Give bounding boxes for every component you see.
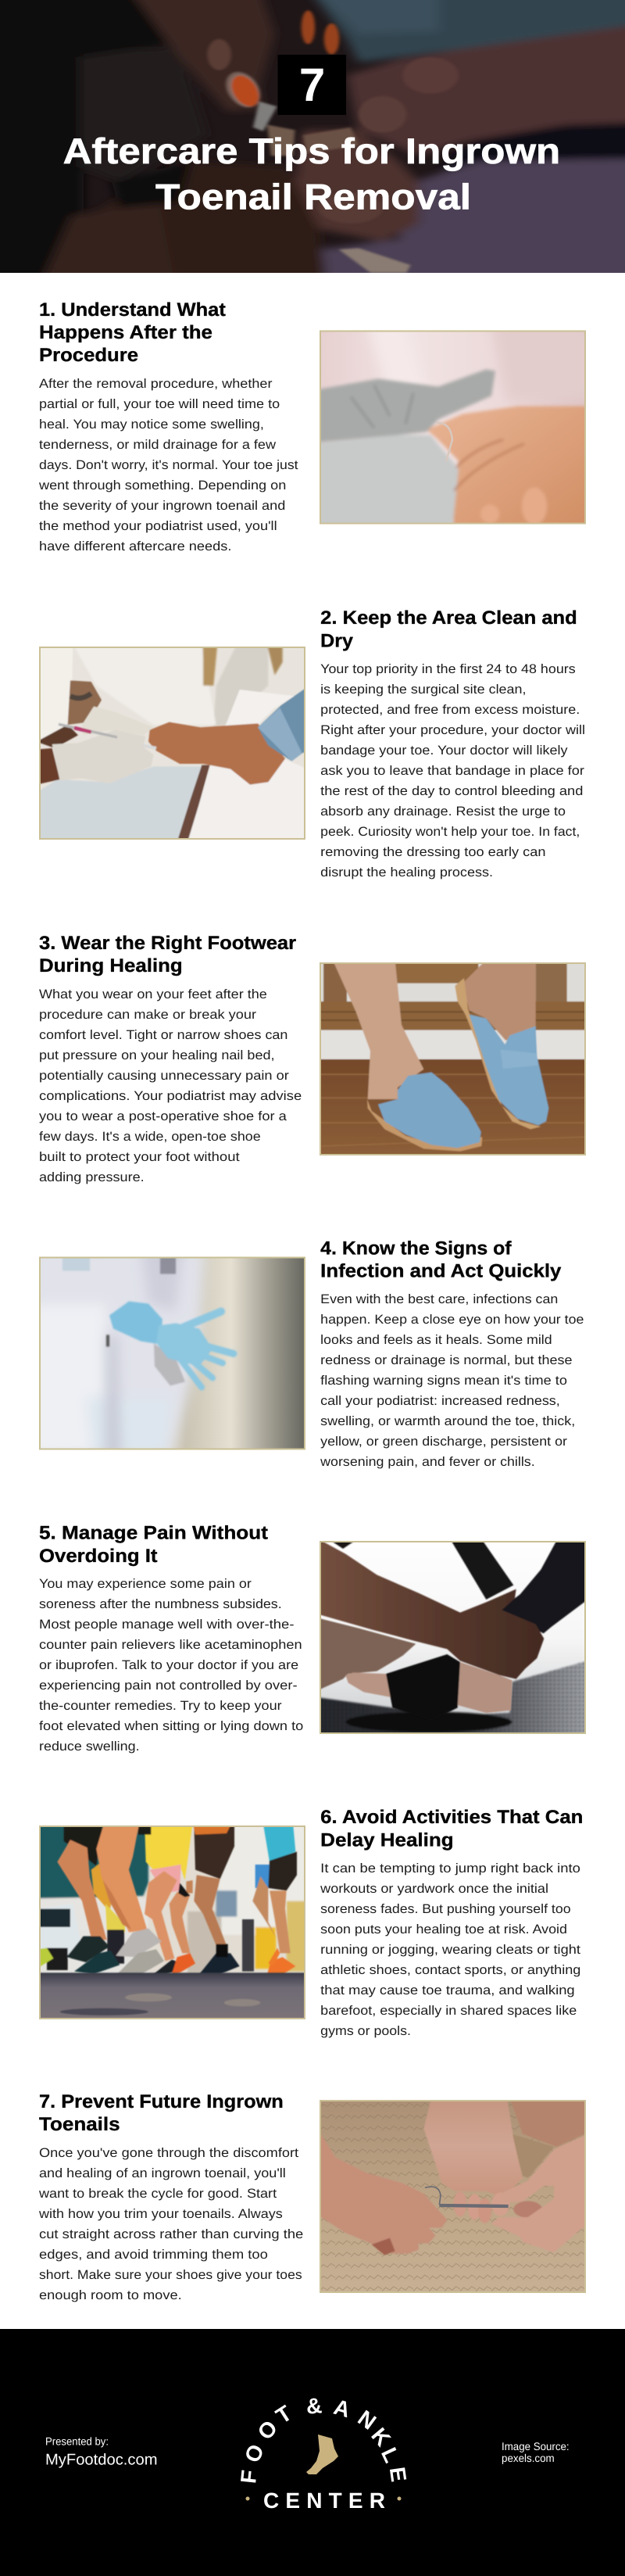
logo: Foot & Ankle Center: & (305, 2393, 323, 2419)
body text 4 (320, 1292, 584, 1469)
body text 7: and healing of an ingrown toenail, you'll (39, 2166, 286, 2180)
body text 6: soreness fades. But pushing yourself too (320, 1902, 571, 1916)
body text 2: removing the dressing too early can (320, 845, 545, 859)
body text 4: worsening pain, and fever or chills. (320, 1455, 535, 1469)
body text 5: counter pain relievers like acetaminophen (39, 1638, 302, 1652)
section 3 (39, 933, 588, 1184)
body text 7: cut straight across rather than curving the (39, 2227, 303, 2241)
section 7 (38, 2091, 588, 2302)
image source credit: pexels.com (502, 2452, 555, 2464)
body text 5: soreness after the numbness subsides. (39, 1597, 282, 1611)
body text 3: comfort level. Tight or narrow shoes can (39, 1028, 288, 1042)
body text 3: potentially causing unnecessary pain or (39, 1069, 289, 1083)
body text 2: protected, and free from excess moisture. (320, 703, 580, 717)
body text 5: reduce swelling. (39, 1739, 140, 1754)
photo 1: gloved hands holding toes (320, 330, 586, 524)
logo: Foot & Ankle Center: O (253, 2416, 282, 2445)
body text 2: bandage your toe. Your doctor will likely (320, 743, 568, 758)
heading 4: 4. Know the Signs of (320, 1238, 512, 1259)
body text 4: flashing warning signs mean it's time to (320, 1374, 567, 1388)
body text 3: built to protect your foot without (39, 1150, 240, 1164)
body text 6: gyms or pools. (320, 2024, 411, 2038)
body text 4: swelling, or warmth around the toe, thick, (320, 1414, 575, 1428)
body text 5: Most people manage well with over-the- (39, 1618, 294, 1632)
body text 4: looks and feels as it heals. Some mild (320, 1333, 552, 1347)
body text 1: partial or full, your toe will need time to (39, 397, 280, 411)
body text 1: tenderness, or mild drainage for a few (39, 438, 276, 452)
logo: Foot & Ankle Center: CENTER (263, 2488, 385, 2513)
body text 6: that may cause toe trauma, and walking (320, 1983, 575, 1997)
body text 1: went through something. Depending on (38, 478, 286, 493)
body text 2: is keeping the surgical site clean, (320, 683, 527, 697)
heading 7: 7. Prevent Future Ingrown (39, 2091, 284, 2112)
body text 2: peek. Curiosity won't help your toe. In fact, (320, 825, 580, 839)
body text 4: call your podiatrist: increased redness, (320, 1394, 560, 1408)
body text 1: After the removal procedure, whether (39, 377, 273, 391)
heading 6 (320, 1807, 583, 1851)
body text 5: experiencing pain not controlled by over- (39, 1679, 298, 1693)
photo 3: feet in blue mule shoes (320, 962, 586, 1155)
section 1 (38, 299, 593, 554)
body text 3: What you wear on your feet after the (39, 987, 267, 1001)
logo: Foot & Ankle Center: F (236, 2469, 262, 2485)
section 5 (39, 1523, 588, 1754)
body text 5: You may experience some pain or (39, 1577, 252, 1591)
logo: Foot & Ankle Center: K (366, 2424, 395, 2451)
body text 6 (320, 1861, 580, 2038)
body text 2: ask you to leave that bandage in place for (320, 764, 585, 778)
body text 3: procedure can make or break your (39, 1008, 257, 1022)
body text 3: few days. It's a wide, open-toe shoe (39, 1130, 261, 1144)
heading 3: During Healing (39, 955, 183, 976)
body text 5 (39, 1577, 303, 1754)
heading 5: Overdoing It (39, 1546, 158, 1567)
main title (63, 131, 560, 217)
body text 7: with how you trim your toenails. Always (38, 2207, 283, 2221)
body text 5: or ibuprofen. Talk to your doctor if you are (39, 1658, 298, 1672)
body text 2 (320, 662, 585, 880)
photo 2: podiatrist treating a foot (39, 647, 305, 840)
body text 6: running or jogging, wearing cleats or tight (320, 1943, 580, 1957)
heading 5: 5. Manage Pain Without (39, 1523, 268, 1543)
heading 2 (320, 607, 577, 652)
body text 3: adding pressure. (39, 1170, 145, 1184)
body text 4: Even with the best care, infections can (320, 1292, 558, 1306)
logo: Foot & Ankle Center: L (377, 2444, 404, 2467)
body text 2: Your top priority in the first 24 to 48 hours (320, 662, 576, 676)
section 4 (31, 1238, 584, 1469)
number badge (278, 55, 346, 115)
heading 6: 6. Avoid Activities That Can (320, 1807, 583, 1828)
logo: Foot & Ankle Center: O (240, 2441, 269, 2466)
heading 1: Happens After the (39, 322, 212, 343)
heading 1: Procedure (39, 345, 138, 366)
body text 5: the-counter remedies. Try to keep your (39, 1699, 282, 1713)
body text 2: the rest of the day to control bleeding and (320, 784, 583, 798)
heading 7 (39, 2091, 284, 2135)
photo 6: runners' legs and shoes on a road (39, 1825, 305, 2019)
heading 4 (320, 1238, 562, 1282)
body text 3: complications. Your podiatrist may advise (39, 1089, 302, 1103)
logo: Foot & Ankle Center: E (385, 2466, 411, 2483)
heading 1: 1. Understand What (39, 299, 226, 321)
body text 1: days. Don't worry, it's normal. Your toe just (39, 458, 298, 472)
heading 1 (39, 299, 226, 366)
body text 5: foot elevated when sitting or lying down to (39, 1719, 303, 1733)
presented by credit: Presented by: (45, 2434, 109, 2447)
number badge: 7 (299, 59, 325, 111)
body text 6: soon puts your healing toe at risk. Avoid (320, 1922, 567, 1936)
presented by credit (45, 2434, 158, 2469)
heading 5 (39, 1523, 268, 1567)
body text 7 (38, 2146, 303, 2302)
body text 3 (39, 987, 302, 1184)
body text 6: barefoot, especially in shared spaces like (320, 2004, 577, 2018)
body text 3: you to wear a post-operative shoe for a (39, 1109, 288, 1123)
heading 4: Infection and Act Quickly (320, 1261, 562, 1282)
logo: Foot & Ankle Center: N (353, 2406, 380, 2434)
header background photo: hands trimming nails, darkened (0, 0, 625, 273)
body text 7: enough room to move. (39, 2288, 182, 2302)
body text 4: redness or drainage is normal, but these (320, 1353, 573, 1367)
section 2 (37, 607, 585, 880)
body text 1: have different aftercare needs. (39, 539, 231, 554)
main title: Aftercare Tips for Ingrown (63, 131, 560, 171)
logo: Foot & Ankle Center: A (331, 2395, 353, 2422)
heading 2: Dry (320, 630, 354, 652)
photo 4: doctor putting on blue gloves (39, 1257, 305, 1449)
photo 5: hand holding wrapped ankle (320, 1541, 586, 1734)
photo 7: trimming toenails on a carpet (320, 2100, 586, 2293)
body text 2: Right after your procedure, your doctor will (320, 723, 585, 737)
body text 7: Once you've gone through the discomfort (39, 2146, 299, 2160)
image source credit (502, 2440, 570, 2464)
section 6 (37, 1807, 583, 2038)
heading 2: 2. Keep the Area Clean and (320, 607, 577, 629)
body text 7: edges, and avoid trimming them too (39, 2248, 268, 2262)
heading 3: 3. Wear the Right Footwear (39, 933, 296, 954)
body text 1: heal. You may notice some swelling, (39, 417, 264, 432)
heading 3 (39, 933, 296, 976)
body text 1: the method your podiatrist used, you'll (39, 519, 277, 533)
body text 2: disrupt the healing process. (320, 865, 493, 880)
body text 2: absorb any drainage. Resist the urge to (320, 804, 566, 819)
footer panel (0, 2329, 625, 2576)
image source credit: Image Source: (502, 2440, 570, 2452)
body text 7: short. Make sure your shoes give your toes (39, 2268, 302, 2282)
header panel (0, 0, 625, 286)
body text 4: yellow, or green discharge, persistent or (320, 1435, 568, 1449)
heading 6: Delay Healing (320, 1829, 454, 1851)
body text 1: the severity of your ingrown toenail and (39, 499, 285, 513)
body text 6: It can be tempting to jump right back into (320, 1861, 580, 1876)
body text 3: put pressure on your healing nail bed, (39, 1048, 275, 1062)
body text 1 (38, 377, 298, 554)
logo: Foot & Ankle Center (236, 2393, 411, 2513)
main title: Toenail Removal (155, 177, 471, 217)
heading 7: Toenails (39, 2114, 120, 2135)
body text 7: want to break the cycle for good. Start (38, 2187, 277, 2201)
body text 6: athletic shoes, contact sports, or anything (320, 1963, 580, 1977)
icon: foot (306, 2434, 338, 2474)
presented by credit: MyFootdoc.com (45, 2452, 158, 2469)
body text 6: workouts or yardwork once the initial (320, 1882, 548, 1896)
body text 4: happen. Keep a close eye on how your toe (320, 1313, 584, 1327)
logo: Foot & Ankle Center: T (272, 2401, 296, 2428)
